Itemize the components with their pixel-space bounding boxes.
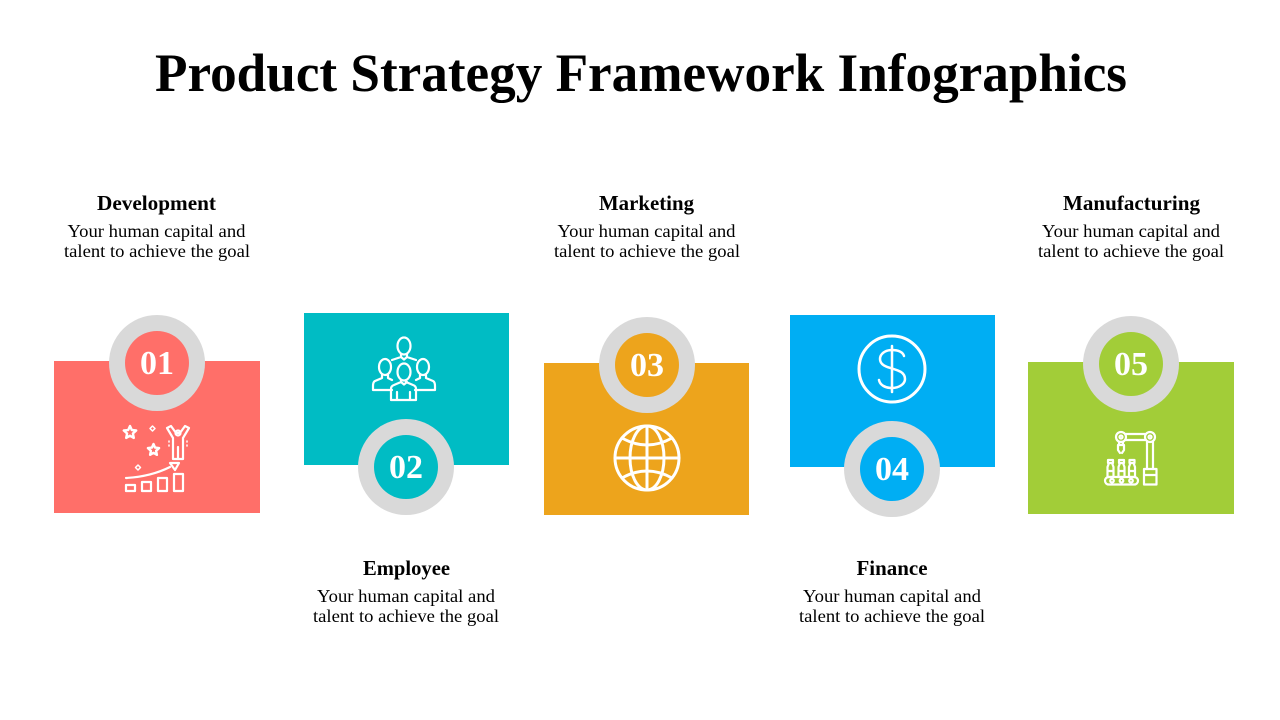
text block: development: talent to achieve the goal — [64, 241, 250, 261]
text block: manufacturing: talent to achieve the goal — [1038, 241, 1224, 261]
text block: development: Your human capital and — [68, 221, 245, 241]
text block: manufacturing: Your human capital and — [1042, 221, 1220, 241]
panel: 03 marketing — [544, 191, 749, 515]
text block: manufacturing — [1038, 221, 1224, 261]
number badge 04 — [844, 421, 940, 517]
text block: finance: talent to achieve the goal — [799, 606, 985, 626]
text block: marketing: talent to achieve the goal — [554, 241, 740, 261]
number badge 03 — [599, 317, 695, 413]
number badge 01: 01 — [140, 345, 174, 382]
card: marketing — [544, 363, 749, 515]
heading: finance: Finance — [856, 556, 928, 580]
heading: development: Development — [97, 191, 216, 215]
title: Product Strategy Framework Infographics — [155, 43, 1127, 103]
card: finance — [790, 315, 995, 467]
text block: development — [64, 221, 250, 261]
number badge 01 — [109, 315, 205, 411]
text block: marketing — [554, 221, 740, 261]
text block: marketing: Your human capital and — [558, 221, 736, 241]
panel: 04 finance — [790, 315, 995, 626]
number badge 02: 02 — [389, 449, 423, 486]
text block: employee: talent to achieve the goal — [313, 606, 499, 626]
heading: marketing: Marketing — [599, 191, 694, 215]
icon: dollar coin — [859, 336, 925, 402]
icon: robot arm — [1105, 432, 1156, 484]
card: employee — [304, 313, 509, 465]
number badge 05: 05 — [1114, 346, 1148, 383]
number badge 02 — [358, 419, 454, 515]
number badge 03: 03 — [630, 347, 664, 384]
panel: 05 manufacturing — [1028, 191, 1234, 514]
icon: team — [373, 338, 435, 400]
number badge 04: 04 — [875, 451, 909, 488]
text block: finance: Your human capital and — [803, 586, 981, 606]
heading: employee: Employee — [363, 556, 450, 580]
panel: 02 employee — [304, 313, 509, 626]
number badge 05 — [1083, 316, 1179, 412]
heading: manufacturing: Manufacturing — [1063, 191, 1201, 215]
panel: 01 development — [54, 191, 260, 513]
text block: finance — [799, 586, 985, 626]
icon: growth chart with person — [124, 426, 189, 491]
text block: employee: Your human capital and — [317, 586, 495, 606]
card: manufacturing — [1028, 362, 1234, 514]
icon: globe — [615, 426, 679, 490]
card: development — [54, 361, 260, 513]
text block: employee — [313, 586, 499, 626]
